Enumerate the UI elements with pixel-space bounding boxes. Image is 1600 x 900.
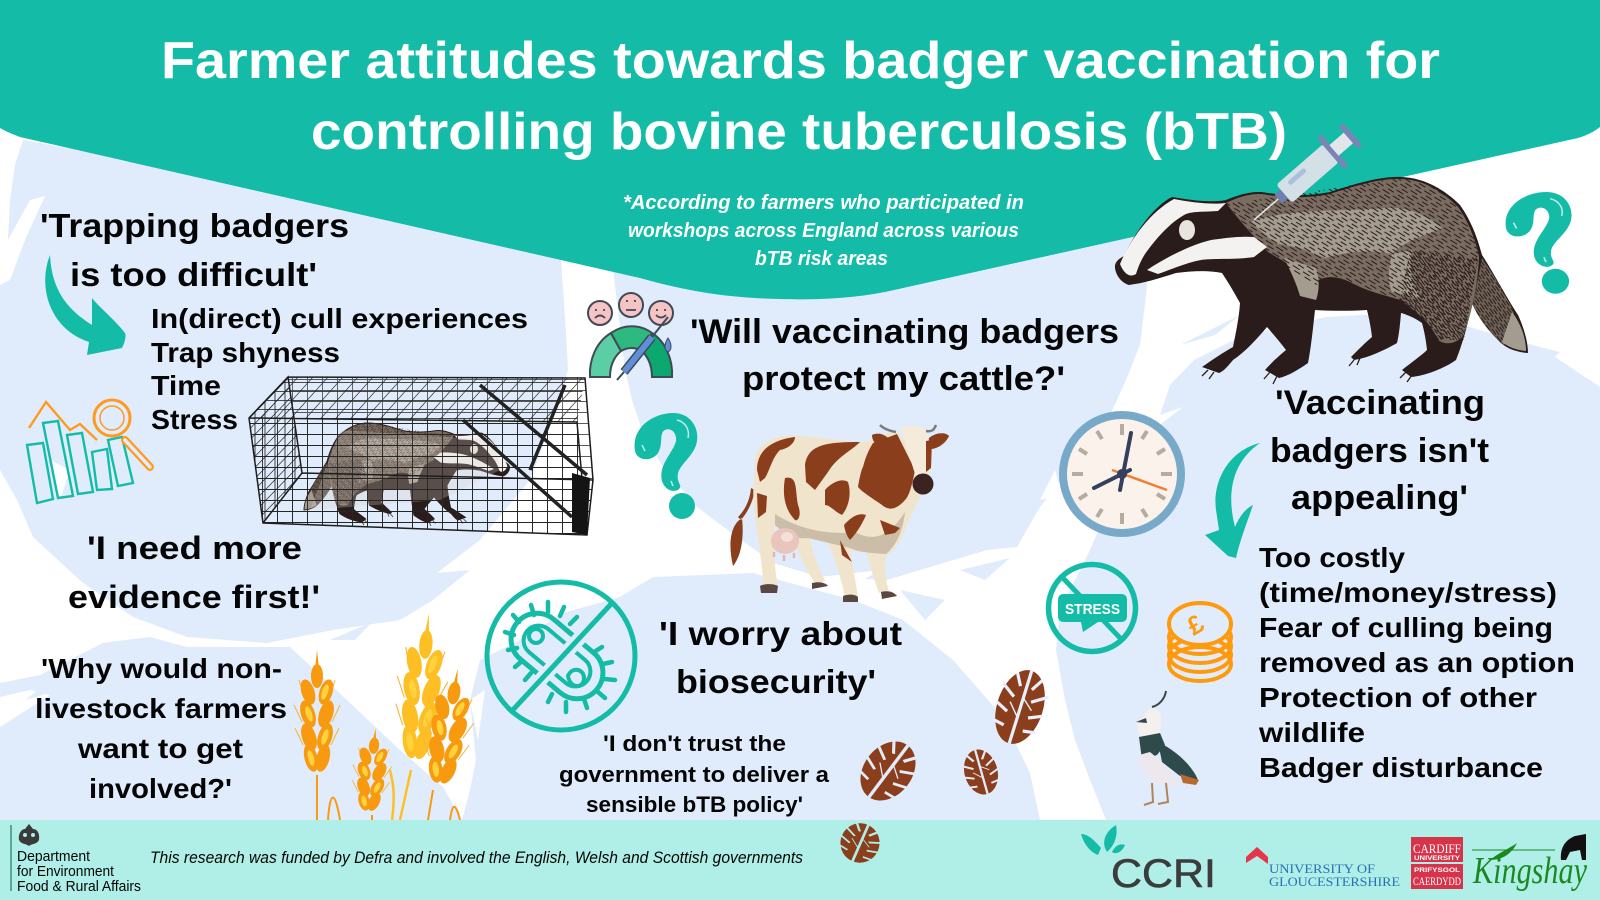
heading: more evidence: evidence first!' [68,579,320,615]
heading: trapping badgers: 'Trapping badgers [40,207,349,244]
icon: pound coins [1169,603,1231,681]
cow illustration [730,425,949,602]
icon: clock [1063,415,1181,533]
heading: vaccinating isn't appealing: badgers isn't [1270,432,1489,470]
icon: muddy footprint lower [848,730,928,812]
quote: non-livestock farmers [35,653,287,804]
University of Gloucestershire logo: UNIVERSITY OF [1269,861,1375,876]
list: appeal barriers [1258,542,1575,783]
heading: worry about biosecurity: 'I worry about [659,615,902,652]
University of Gloucestershire logo [1246,847,1400,889]
arrow: vaccinating to list [1205,443,1260,558]
quote: non-livestock farmers: livestock farmers [35,693,287,724]
list: appeal barriers: Too costly [1259,542,1405,573]
icon: crossed out bacterium [487,582,635,730]
list: trapping barriers: In(direct) cull experiences [151,303,528,334]
quote: trust government [559,731,830,817]
list: trapping barriers [151,303,528,435]
heading: vaccinating isn't appealing: appealing' [1291,479,1468,517]
heading: trapping badgers: is too difficult' [70,256,317,293]
quote: non-livestock farmers: want to get [77,733,243,764]
icon: no stress: STRESS [1065,601,1120,618]
funding statement: This research was funded by Defra and involved the English, Welsh and Scottish governments [150,849,803,867]
icon: muddy footprint small [958,746,1004,798]
subtitle note: bTB risk areas [755,248,888,270]
heading: will vaccinating protect cattle: protect my cattle?' [742,360,1065,398]
Cardiff University logo: UNIVERSITY [1414,856,1460,862]
list: trapping barriers: Time [151,370,221,401]
list: appeal barriers: Protection of other [1259,682,1537,713]
Defra logo: for Environment [17,864,114,880]
heading: worry about biosecurity: biosecurity' [676,663,876,700]
quote: trust government: 'I don't trust the [603,731,786,756]
icon: no stress [1048,564,1136,652]
icon: question mark centre [635,413,697,519]
Cardiff University logo [1411,837,1463,889]
heading: more evidence [68,530,320,615]
icon: wheat [294,611,482,820]
list: trapping barriers: Stress [151,404,238,435]
icon: data chart with magnifier [27,400,150,503]
quote: non-livestock farmers: involved?' [89,773,232,804]
list: appeal barriers: (time/money/stress) [1259,577,1557,608]
Defra logo [11,824,141,895]
list: appeal barriers: wildlife [1258,717,1365,748]
heading: vaccinating isn't appealing: 'Vaccinating [1275,384,1485,422]
list: appeal barriers: Fear of culling being [1259,612,1553,643]
arrow: trapping to list [45,255,126,355]
CCRI logo [1081,825,1216,896]
University of Gloucestershire logo: GLOUCESTERSHIRE [1269,874,1400,889]
subtitle note [623,192,1024,270]
icon: muddy footprint footer [833,816,887,870]
icon: pound coins: £ [1181,608,1209,641]
quote: trust government: government to deliver a [559,762,830,787]
Defra logo: Department [17,849,90,865]
icon: lapwing bird [1136,691,1199,805]
list: appeal barriers: removed as an option [1259,647,1575,678]
Cardiff University logo: CAERDYDD [1413,874,1461,888]
Cardiff University logo: CARDIFF [1413,841,1461,856]
heading: will vaccinating protect cattle [690,313,1119,398]
subtitle note: *According to farmers who participated in [623,192,1024,214]
title [161,32,1440,161]
list: trapping barriers: Trap shyness [151,337,340,368]
CCRI logo: CCRI [1111,852,1216,896]
icon: syringe [1240,118,1367,236]
trap with badger [249,377,593,535]
header banner [0,0,1600,299]
icon: muddy footprint large [985,663,1055,751]
footer band [0,820,1600,900]
title: Farmer attitudes towards badger vaccination for [161,32,1440,90]
list: appeal barriers: Badger disturbance [1259,752,1543,783]
heading: will vaccinating protect cattle: 'Will vaccinating badgers [690,313,1119,351]
badger illustration [1115,177,1528,384]
heading: more evidence: 'I need more [87,530,302,566]
title: controlling bovine tuberculosis (bTB) [311,103,1287,161]
Cardiff University logo: PRIFYSGOL [1414,868,1460,874]
quote: non-livestock farmers: 'Why would non- [41,653,282,684]
subtitle note: workshops across England across various [628,220,1019,242]
Defra logo: Food & Rural Affairs [17,879,141,895]
Kingshay logo [1472,834,1587,892]
heading: trapping badgers [40,207,349,293]
quote: trust government: sensible bTB policy' [586,792,803,817]
icon: vaccine gauge with faces [588,293,673,380]
heading: worry about biosecurity [659,615,902,700]
icon: question mark right [1506,192,1572,294]
heading: vaccinating isn't appealing [1270,384,1489,517]
